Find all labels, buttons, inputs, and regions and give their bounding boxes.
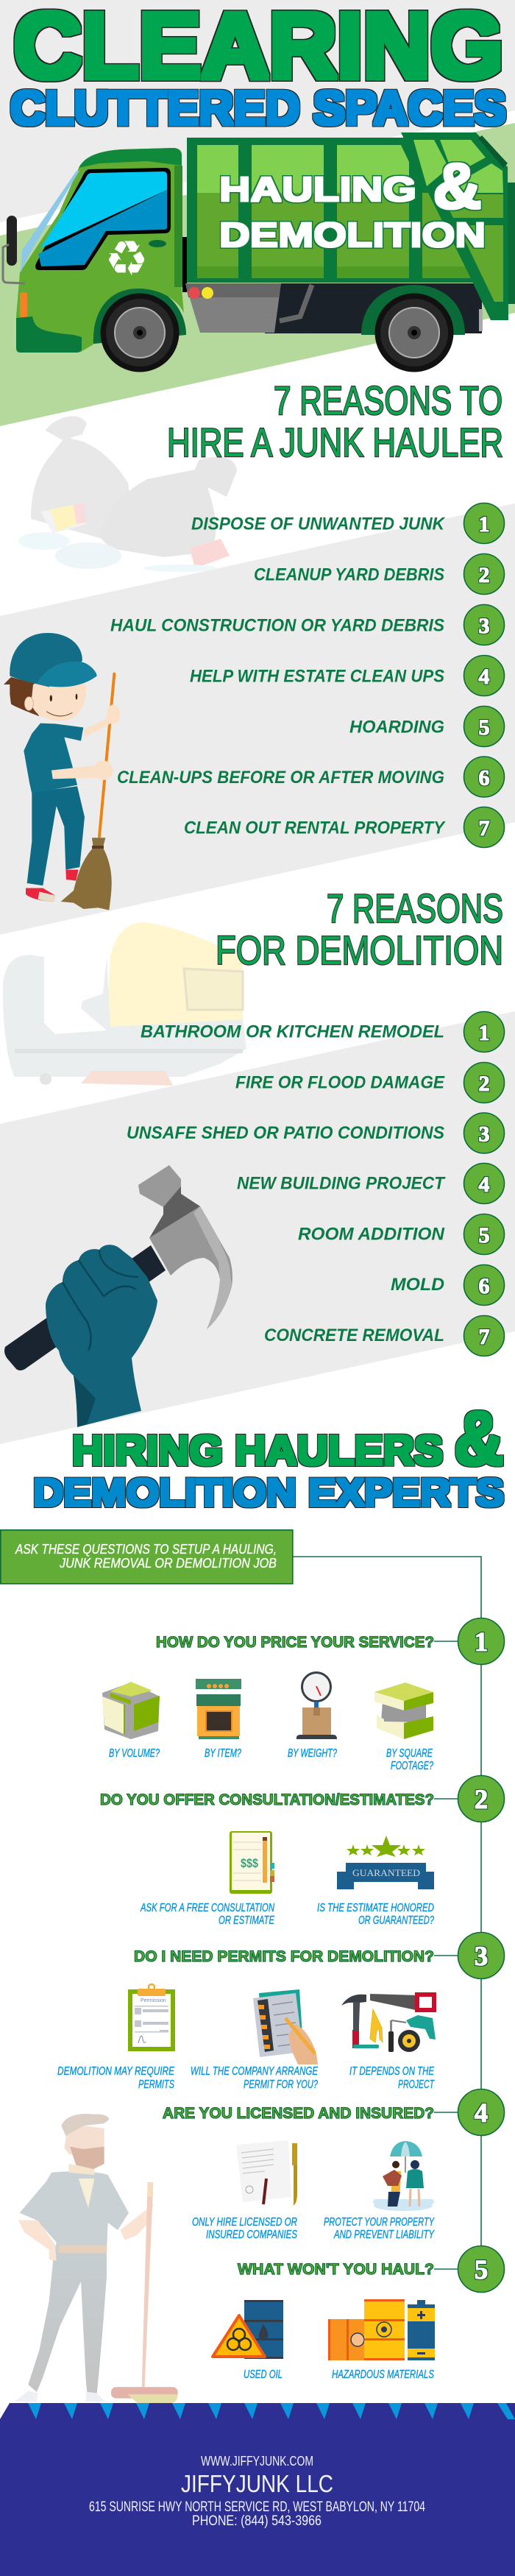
item 2: FIRE OR FLOOD DAMAGE <box>235 1073 445 1092</box>
handyman broom <box>111 2182 178 2403</box>
handyman feet <box>15 2391 105 2402</box>
number marker <box>434 2089 505 2136</box>
item 1: 1 <box>478 512 490 537</box>
item 3: HAUL CONSTRUCTION OR YARD DEBRIS <box>110 615 444 636</box>
item 6: 6 <box>478 765 490 790</box>
item 7 <box>184 807 505 848</box>
handyman head <box>61 2114 109 2175</box>
number marker: 3 <box>475 1942 488 1972</box>
labels: BY VOLUME? <box>109 1747 160 1760</box>
footer contact text: WWW.JIFFYJUNK.COM <box>201 2454 313 2469</box>
illustration: green garbage truck <box>3 132 515 372</box>
item 7: CLEAN OUT RENTAL PROPERTY <box>184 818 446 838</box>
icon: permission clipboard <box>128 1984 175 2051</box>
labels <box>192 2216 435 2241</box>
number marker: 1 <box>475 1627 488 1657</box>
heading: hiring haulers and demolition experts: & <box>454 1396 504 1482</box>
worker broom head <box>61 838 112 910</box>
item 2: 2 <box>478 1072 490 1096</box>
item 5: 5 <box>478 1223 490 1248</box>
question heading: WHAT WON'T YOU HAUL? <box>238 2261 434 2278</box>
heading: 7 reasons to hire a junk hauler <box>167 378 503 465</box>
truck door handle <box>149 240 166 247</box>
item 1 <box>141 1011 505 1052</box>
icon: notepad with dollars <box>230 1831 274 1894</box>
labels: PERMITS <box>138 2078 174 2091</box>
question heading: DO YOU OFFER CONSULTATION/ESTIMATES? <box>100 1791 434 1808</box>
truck toolbox and lights <box>185 283 483 333</box>
item 3: 3 <box>478 614 490 638</box>
question heading: ARE YOU LICENSED AND INSURED? <box>163 2105 434 2122</box>
footer contact text: PHONE: (844) 543-3966 <box>192 2513 322 2529</box>
heading: hiring haulers and demolition experts: HIRING HAULERS <box>72 1427 443 1474</box>
item 2 <box>254 553 505 595</box>
footer zigzag <box>28 2403 515 2419</box>
number marker <box>434 1618 505 1665</box>
heading: 7 reasons for demolition <box>216 885 503 973</box>
truck rear wheel <box>375 293 453 372</box>
worker shirt <box>24 723 83 793</box>
illustration: faded trash bags <box>18 416 237 572</box>
icon: stacked squares <box>374 1682 433 1739</box>
labels: WILL THE COMPANY ARRANGE <box>191 2065 318 2078</box>
question 2: estimates <box>100 1775 505 1927</box>
icon: volume box <box>102 1682 160 1739</box>
icon: recycling symbol: ♻ <box>104 230 149 287</box>
illustration: fist holding hammer <box>4 1165 232 1427</box>
item 6: MOLD <box>391 1275 444 1295</box>
labels: USED OIL <box>244 2368 283 2381</box>
item 4: NEW BUILDING PROJECT <box>237 1173 446 1194</box>
callout: ask these questions <box>1 1530 293 1584</box>
item 6: CLEAN-UPS BEFORE OR AFTER MOVING <box>117 768 444 788</box>
worker hair and head <box>4 677 86 721</box>
item 6: 6 <box>478 1274 490 1298</box>
number marker <box>434 2246 505 2292</box>
worker cap <box>10 633 97 687</box>
illustration: worker sweeping with broom <box>4 633 120 910</box>
truck rear bar <box>506 183 515 304</box>
number marker: 5 <box>475 2255 488 2285</box>
worker pants <box>27 786 85 885</box>
truck label: Hauling & Demolition: HAULING <box>219 170 416 208</box>
labels <box>140 1902 434 1927</box>
number marker: 4 <box>475 2098 488 2129</box>
truck bumper <box>16 316 82 353</box>
labels: HAZARDOUS MATERIALS <box>332 2368 434 2381</box>
labels: IS THE ESTIMATE HONORED <box>317 1902 434 1914</box>
truck windscreen <box>35 168 171 270</box>
item 5: 5 <box>478 715 490 740</box>
icon: oven <box>196 1679 241 1739</box>
question heading: HOW DO YOU PRICE YOUR SERVICE? <box>156 1634 434 1651</box>
title line: Cluttered Spaces: CLUTTERED SPACES <box>10 81 506 135</box>
truck label: Hauling & Demolition <box>219 149 486 254</box>
item 3 <box>110 605 505 645</box>
item 5 <box>349 707 505 746</box>
list: junk hauler reasons <box>110 503 505 848</box>
callout: ask these questions: ASK THESE QUESTIONS TO SETUP A HAULING, <box>15 1542 277 1557</box>
title: Clearing Cluttered Spaces <box>10 0 506 135</box>
handyman torso <box>20 2171 129 2252</box>
labels: BY SQUARE <box>386 1747 433 1760</box>
labels: PROTECT YOUR PROPERTY <box>324 2216 435 2229</box>
item 2: 2 <box>478 563 490 587</box>
worker broom stick <box>99 674 114 837</box>
labels: PERMIT FOR YOU? <box>244 2078 318 2091</box>
callout: ask these questions: JUNK REMOVAL OR DEMOLITION JOB <box>59 1556 277 1571</box>
icon: people under umbrella <box>373 2141 434 2211</box>
question heading: DO I NEED PERMITS FOR DEMOLITION? <box>134 1948 434 1965</box>
truck cab <box>16 148 187 352</box>
footer band <box>0 2403 515 2576</box>
truck cargo box <box>187 138 477 283</box>
icon: notepad with dollars: $$$ <box>241 1856 258 1870</box>
illustration: faded demolition machine <box>3 922 246 1086</box>
truck rear gate <box>401 132 508 320</box>
icon: weighing scale <box>296 1672 337 1739</box>
labels: FOOTAGE? <box>391 1760 433 1772</box>
icon: oil barrel and biohazard <box>213 2300 283 2359</box>
truck wheel arches <box>87 285 465 344</box>
item 1: 1 <box>478 1021 490 1045</box>
item 7: CONCRETE REMOVAL <box>264 1326 444 1345</box>
number marker: 2 <box>475 1785 488 1815</box>
labels: IT DEPENDS ON THE <box>349 2065 434 2078</box>
item 6 <box>391 1264 505 1306</box>
icon: assorted tools <box>341 1994 436 2052</box>
fist <box>46 1245 157 1427</box>
labels: ASK FOR A FREE CONSULTATION <box>140 1902 274 1914</box>
icon: guaranteed badge <box>337 1836 434 1889</box>
icon: checklist and hand <box>253 1989 318 2064</box>
worker arms <box>52 704 120 780</box>
item 4: 4 <box>478 1172 490 1197</box>
labels: BY ITEM? <box>205 1747 241 1760</box>
question 1: pricing <box>102 1618 505 1772</box>
labels: INSURED COMPANIES <box>206 2229 297 2241</box>
truck chassis <box>265 283 482 333</box>
labels: DEMOLITION MAY REQUIRE <box>57 2065 174 2078</box>
truck headlight <box>20 292 27 318</box>
question 4: licensing <box>163 2089 505 2241</box>
labels: OR ESTIMATE <box>219 1914 274 1927</box>
icon: hazardous drums and battery <box>328 2299 435 2360</box>
item 6 <box>117 757 505 797</box>
truck label: Hauling & Demolition: DEMOLITION <box>219 216 486 254</box>
handyman arms <box>18 2203 153 2261</box>
footer contact text <box>89 2454 425 2529</box>
item 3 <box>127 1113 505 1153</box>
item 1 <box>191 503 505 543</box>
labels: BY WEIGHT? <box>288 1747 337 1760</box>
connector line timeline <box>293 1557 481 2248</box>
question 5: what won't you haul <box>213 2246 505 2381</box>
item 3: UNSAFE SHED OR PATIO CONDITIONS <box>127 1123 444 1143</box>
item 4 <box>190 655 505 696</box>
list: demolition reasons <box>127 1011 505 1356</box>
footer contact text: JIFFYJUNK LLC <box>181 2470 333 2497</box>
item 1: BATHROOM OR KITCHEN REMODEL <box>141 1022 444 1042</box>
labels <box>109 1747 433 1772</box>
heading: hiring haulers and demolition experts <box>33 1396 504 1515</box>
item 2: CLEANUP YARD DEBRIS <box>254 565 444 584</box>
item 5: HOARDING <box>349 717 444 737</box>
handyman legs <box>28 2252 107 2393</box>
item 4: 4 <box>478 665 490 689</box>
truck label: Hauling & Demolition: & <box>433 149 482 222</box>
icon: permission clipboard: Permission <box>141 1998 166 2003</box>
labels <box>244 2368 434 2381</box>
labels: OR GUARANTEED? <box>358 1914 434 1927</box>
icon: signed document <box>236 2140 297 2206</box>
hammer handle <box>4 1245 166 1370</box>
number marker <box>434 1775 505 1822</box>
truck side mirror <box>3 216 25 283</box>
handyman belt <box>59 2246 107 2253</box>
question 3: permits <box>57 1933 505 2091</box>
item 4 <box>237 1163 505 1204</box>
number marker <box>434 1933 505 1978</box>
labels: PROJECT <box>398 2078 435 2091</box>
background: diagonal bands <box>0 0 515 1444</box>
item 2 <box>235 1063 505 1103</box>
worker shoes <box>26 870 79 902</box>
item 1: DISPOSE OF UNWANTED JUNK <box>191 514 446 534</box>
hammer head <box>138 1165 232 1329</box>
item 4: HELP WITH ESTATE CLEAN UPS <box>190 667 444 686</box>
item 7: 7 <box>478 816 490 841</box>
item 7 <box>264 1316 505 1356</box>
item 3: 3 <box>478 1122 490 1147</box>
item 7: 7 <box>478 1325 490 1349</box>
heading: hiring haulers and demolition experts: DEMOLITION EXPERTS <box>33 1471 504 1515</box>
labels: AND PREVENT LIABILITY <box>333 2229 435 2241</box>
item 5: ROOM ADDITION <box>298 1225 445 1244</box>
illustration: faded handyman with broom <box>15 2114 178 2403</box>
truck front wheel <box>100 293 180 372</box>
labels <box>57 2065 435 2091</box>
icon: guaranteed badge: GUARANTEED <box>352 1867 420 1878</box>
item 5 <box>298 1214 505 1254</box>
labels: ONLY HIRE LICENSED OR <box>192 2216 297 2229</box>
